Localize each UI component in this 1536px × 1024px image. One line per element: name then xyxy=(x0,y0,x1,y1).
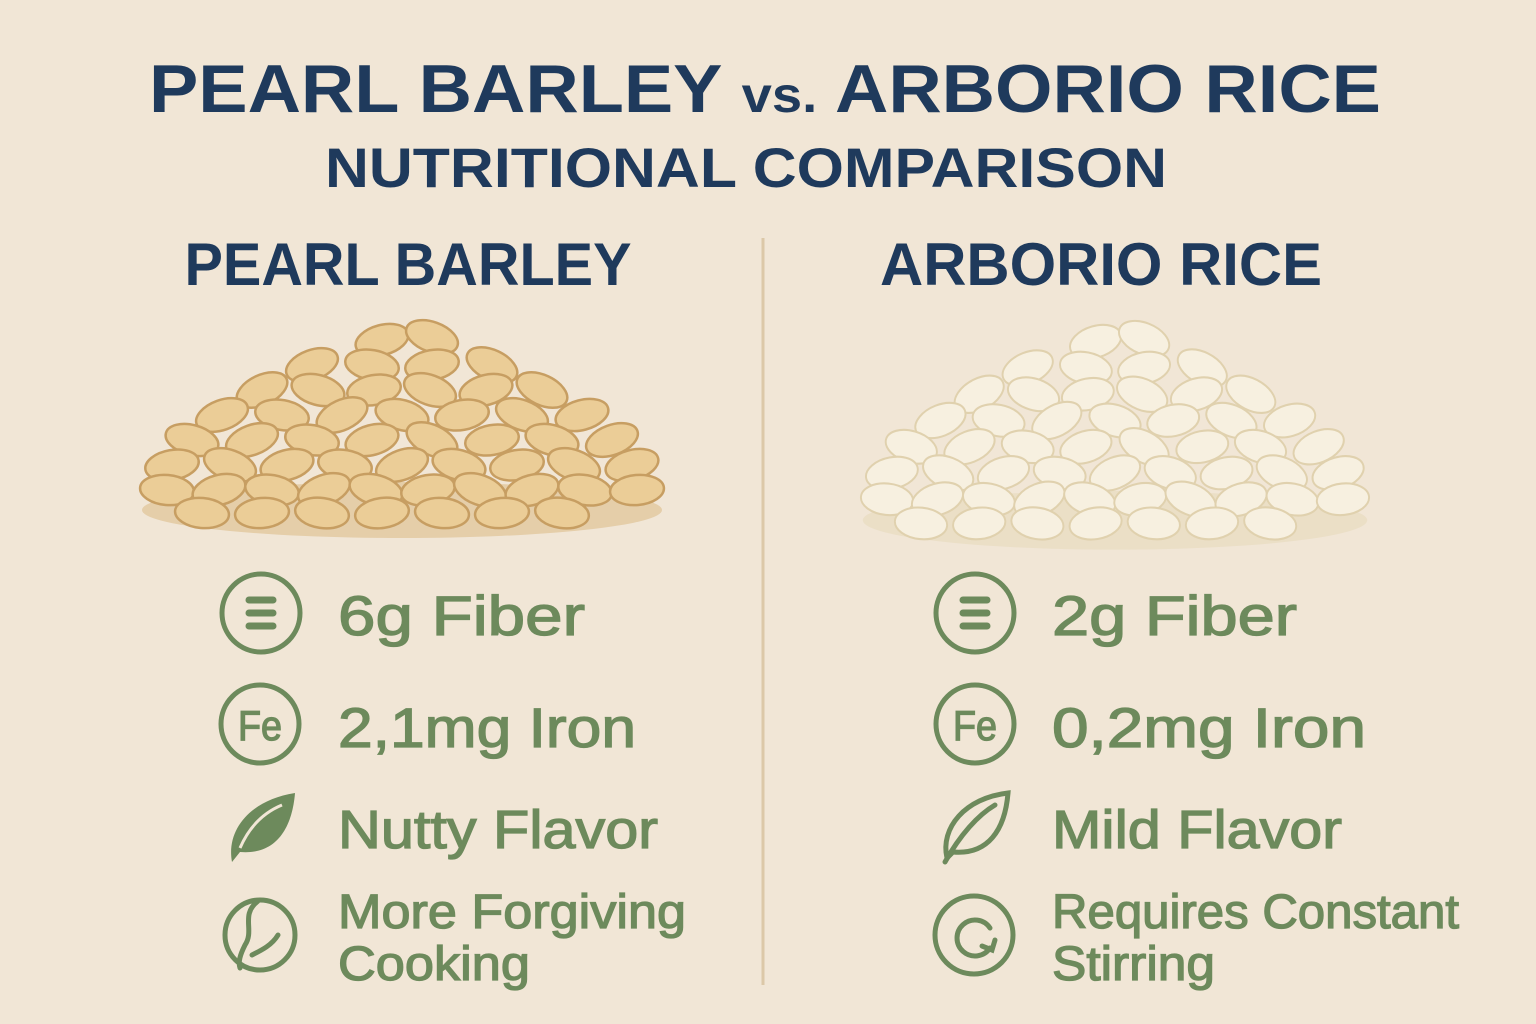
icon: iron xyxy=(221,685,299,763)
text: stirring xyxy=(1052,886,1459,991)
text: flavor: Mild Flavor xyxy=(1052,800,1342,860)
text: fiber: 2g Fiber xyxy=(1052,584,1297,647)
subtitle: NUTRITIONAL COMPARISON xyxy=(325,136,1167,199)
text: cooking: Cooking xyxy=(338,938,530,991)
title: PEARL BARLEY vs. ARBORIO RICE xyxy=(149,51,1381,127)
text: stirring: Stirring xyxy=(1052,938,1215,991)
text: iron: 2,1mg Iron xyxy=(338,696,636,759)
text: flavor: Nutty Flavor xyxy=(338,800,658,860)
heading: pearl barley: PEARL BARLEY xyxy=(184,231,632,298)
illustration: rice pile xyxy=(860,314,1370,550)
icon: stirring xyxy=(935,896,1013,974)
icon: iron xyxy=(936,685,1014,763)
icon: iron: Fe xyxy=(238,702,282,749)
text: iron: 0,2mg Iron xyxy=(1052,696,1366,759)
text: fiber: 6g Fiber xyxy=(338,584,585,647)
panel: pearl barley xyxy=(139,231,686,991)
icon: iron: Fe xyxy=(953,702,997,749)
text: cooking: More Forgiving xyxy=(338,886,686,939)
text: cooking xyxy=(338,886,686,991)
panel: arborio rice xyxy=(860,231,1459,991)
icon: fiber xyxy=(936,574,1014,652)
icon: leaf xyxy=(945,793,1008,862)
icon: fiber xyxy=(222,574,300,652)
icon: leaf xyxy=(231,793,295,862)
divider xyxy=(762,238,764,985)
icon: forgiving cooking xyxy=(225,900,295,970)
illustration: barley pile xyxy=(139,314,665,538)
heading: arborio rice: ARBORIO RICE xyxy=(880,231,1322,298)
text: stirring: Requires Constant xyxy=(1052,886,1459,939)
